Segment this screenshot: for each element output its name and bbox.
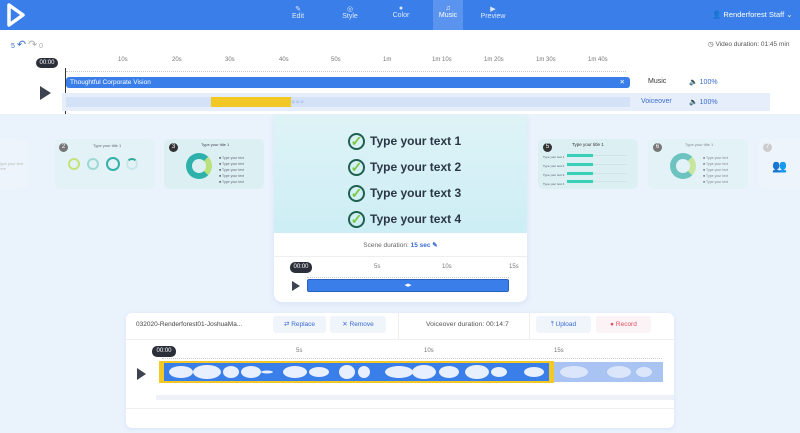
ruler: 00:00 xyxy=(39,60,54,66)
voiceover panel: 10s xyxy=(424,348,434,354)
undo/redo: 5 ↶ ↷ 0 xyxy=(11,39,43,51)
top white timeline area: 40s xyxy=(279,57,289,63)
central scene card xyxy=(274,115,527,302)
scene card 5: Type your text 4 xyxy=(543,182,564,186)
checklist: Type your text 4 xyxy=(370,212,461,226)
top white timeline area xyxy=(0,30,800,114)
voiceover panel: 5s xyxy=(296,348,302,354)
scene timeline xyxy=(290,262,312,273)
nav: Style xyxy=(342,6,358,20)
scene card 2 xyxy=(55,139,155,189)
top white timeline area: 🔈 100% xyxy=(689,99,718,106)
scene card 6: 6 xyxy=(656,144,659,150)
central scene card: 15s xyxy=(509,264,519,270)
top white timeline area: Music xyxy=(648,78,666,85)
scene card 2: 2 xyxy=(62,144,65,150)
top white timeline area: 1m 10s xyxy=(432,57,452,63)
voiceover panel: 15s xyxy=(554,348,564,354)
voiceover track xyxy=(62,93,770,111)
scene card 6: ■ Type your text xyxy=(703,174,728,178)
scene card 5: Type your title 1 xyxy=(572,142,604,147)
scene card 6: ■ Type your text xyxy=(703,180,728,184)
nav: Music active: ♫ xyxy=(445,5,451,12)
record button xyxy=(596,316,651,333)
checklist: ✓ xyxy=(351,158,362,174)
music track: Thoughtful Corporate Vision xyxy=(70,79,151,86)
nav: Edit: Edit xyxy=(292,13,304,20)
scene card 2: Type your title 1 xyxy=(93,143,121,148)
scene card 6: ■ Type your text xyxy=(703,156,728,160)
ruler xyxy=(36,58,58,68)
checklist: ✓ xyxy=(351,210,362,226)
nav: Style: Style xyxy=(342,13,358,20)
central scene card: 10s xyxy=(442,264,452,270)
checklist: ✓ xyxy=(351,184,362,200)
top white timeline area: 1m xyxy=(383,57,391,63)
nav: Preview xyxy=(481,6,506,20)
top white timeline area: 1m 40s xyxy=(588,57,608,63)
voiceover duration: Voiceover duration: 00:14:7 xyxy=(426,321,509,328)
top white timeline area: 🔈 100% xyxy=(689,79,718,86)
scene card 6: ■ Type your text xyxy=(703,168,728,172)
nav: Edit: ✎ xyxy=(295,6,301,13)
waveform xyxy=(159,361,663,383)
music track xyxy=(66,77,630,88)
scene card 3: ■ Type your text xyxy=(219,156,244,160)
record button: ● Record xyxy=(610,321,637,328)
replace button: ⇄ Replace xyxy=(284,321,315,328)
nav: Preview: Preview xyxy=(481,13,505,20)
remove button: ✕ Remove xyxy=(342,321,374,328)
scene card 7 (faded): 👥 xyxy=(772,159,787,173)
scene card 3: 3 xyxy=(172,144,175,150)
scene card 5: Type your text 1 xyxy=(543,155,564,159)
scene card 7 (faded): 7 xyxy=(766,144,769,150)
remove button xyxy=(330,316,386,333)
checklist: Type your text 2 xyxy=(370,160,461,174)
nav: Music active: Music xyxy=(439,12,457,19)
nav: Color xyxy=(393,5,410,19)
top white timeline area: 1m 30s xyxy=(536,57,556,63)
central scene card: 5s xyxy=(374,264,380,270)
waveform timeline xyxy=(152,346,176,357)
scene card 5: 5 xyxy=(546,144,549,150)
top white timeline area: 20s xyxy=(172,57,182,63)
scene timeline: 00:00 xyxy=(293,264,308,270)
checklist: Type your text 3 xyxy=(370,186,461,200)
header bar xyxy=(0,0,800,30)
nav: Style: ◎ xyxy=(347,6,353,13)
nav: Edit xyxy=(292,6,304,20)
top white timeline area: 30s xyxy=(225,57,235,63)
nav: Music active xyxy=(433,0,463,30)
file name: 032020-Renderforest01-JoshuaMa... xyxy=(136,321,242,328)
waveform timeline: 00:00 xyxy=(156,348,172,354)
upload button xyxy=(536,316,591,333)
logo xyxy=(7,3,25,27)
top white timeline area: 1m 20s xyxy=(484,57,504,63)
nav: Color: Color xyxy=(393,12,409,19)
top white timeline area: 10s xyxy=(118,57,128,63)
upload button: ⤒ Upload xyxy=(551,321,576,328)
preview area xyxy=(274,115,527,233)
play button xyxy=(40,86,51,100)
central scene card: ◂▸ xyxy=(404,282,412,289)
scene card 3: Type your title 1 xyxy=(201,142,229,147)
scene card 3: ■ Type your text xyxy=(219,180,244,184)
scene card 3: ■ Type your text xyxy=(219,162,244,166)
replace button xyxy=(273,316,326,333)
scene card 6: Type your title 1 xyxy=(685,142,713,147)
music track: ✕ xyxy=(620,79,625,86)
scene duration: Scene duration: 15 sec ✎ xyxy=(363,242,438,249)
scene card 1 (faded) xyxy=(0,139,28,189)
scene card 7 (faded) xyxy=(758,139,800,189)
top white timeline area: Voiceover xyxy=(641,98,672,105)
scene card 3: ■ Type your text xyxy=(219,168,244,172)
scene card 5: Type your text 3 xyxy=(543,173,564,177)
scene card 5: Type your text 2 xyxy=(543,164,564,168)
scene card 3 xyxy=(164,139,264,189)
top white timeline area: ⋄⋄⋄ xyxy=(291,99,304,106)
video duration: ◷ Video duration: 01:45 min xyxy=(708,41,789,48)
checklist: Type your text 1 xyxy=(370,134,461,148)
scene card 5 xyxy=(538,139,638,189)
voiceover panel xyxy=(126,313,674,428)
scene card 6 xyxy=(648,139,748,189)
nav: Preview: ▶ xyxy=(490,6,496,13)
scene card 3: ■ Type your text xyxy=(219,174,244,178)
top white timeline area: 50s xyxy=(331,57,341,63)
checklist: ✓ xyxy=(351,132,362,148)
checklist xyxy=(348,132,462,228)
user: 👤 Renderforest Staff ⌄ xyxy=(712,10,793,19)
nav: Color: ● xyxy=(399,5,403,12)
scene card 6: ■ Type your text xyxy=(703,162,728,166)
